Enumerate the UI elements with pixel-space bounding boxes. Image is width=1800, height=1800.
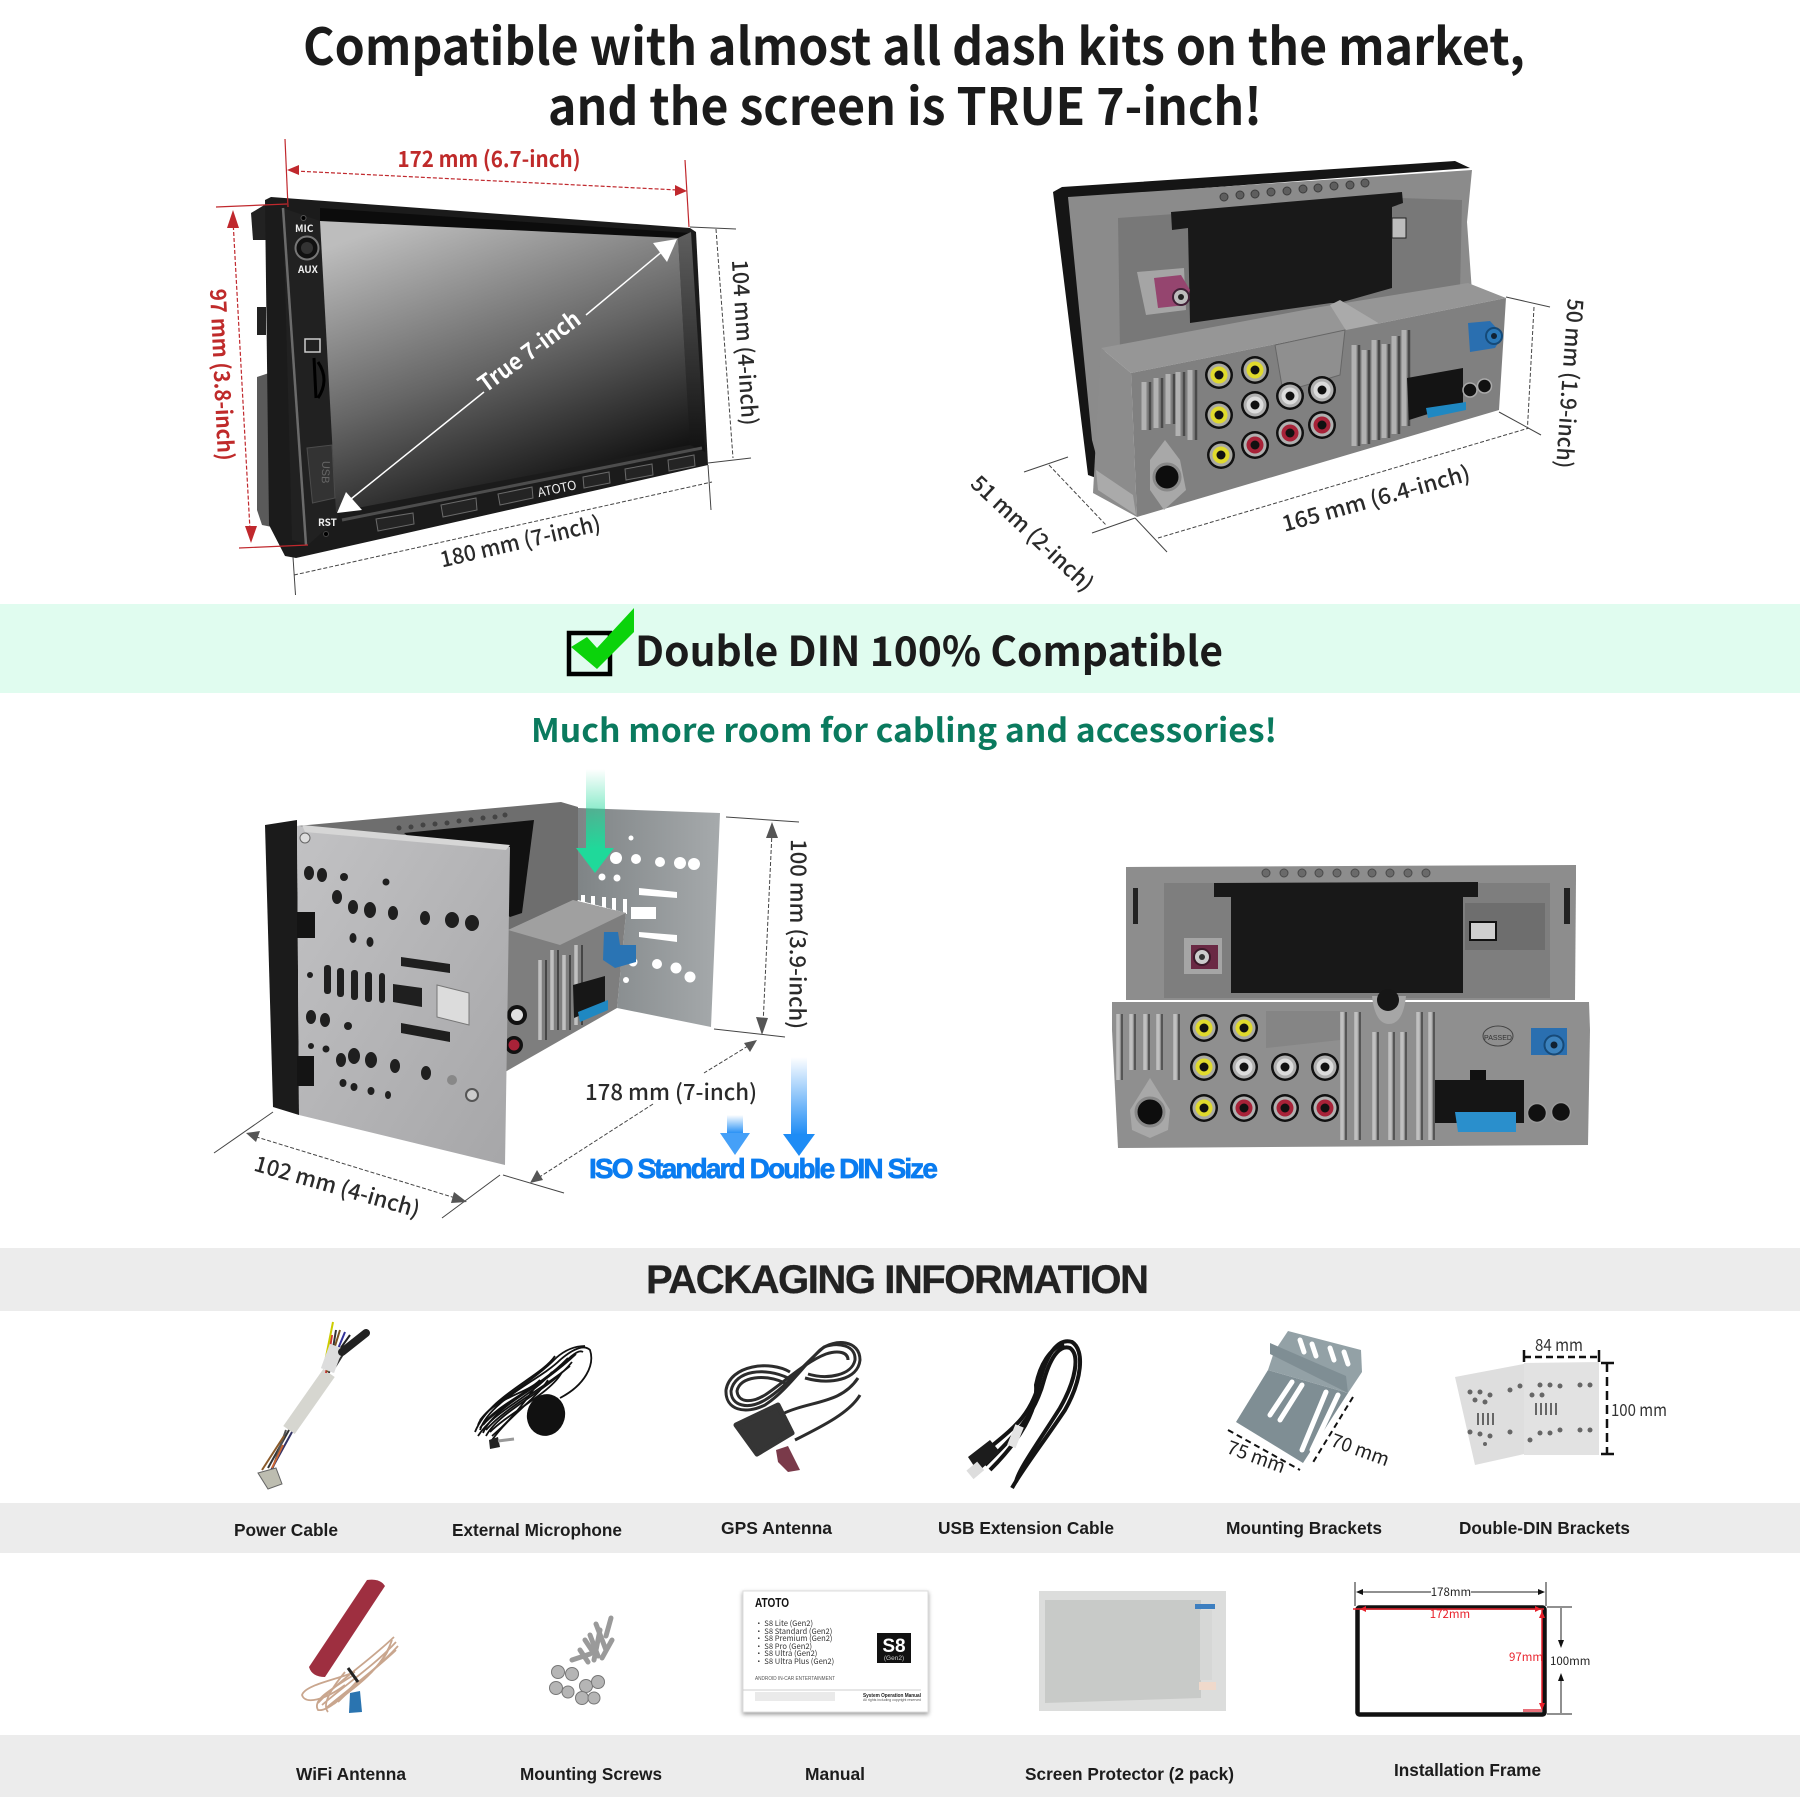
title: Compatible with almost all dash kits on the market, xyxy=(303,6,1525,80)
item: installation frame xyxy=(1353,1582,1590,1714)
dimension: 180 mm xyxy=(293,465,712,595)
rear device xyxy=(1053,161,1506,517)
panel: rear view of head unit with dimensions xyxy=(964,161,1593,598)
device front body: USB xyxy=(319,461,331,484)
item: manual: System Operation Manual xyxy=(863,1693,921,1699)
arrow: green downward xyxy=(576,769,614,873)
plate holes xyxy=(304,866,479,1099)
item: USB extension cable xyxy=(966,1341,1080,1488)
panel: straight rear view xyxy=(1112,865,1590,1148)
item: power cable xyxy=(258,1322,366,1489)
icon: green check in box xyxy=(569,608,634,674)
front black side xyxy=(265,820,299,1115)
item: mounting brackets xyxy=(1224,1331,1394,1479)
item: external microphone xyxy=(475,1346,591,1449)
title: and the screen is TRUE 7-inch! xyxy=(548,66,1262,140)
item: installation frame: 178mm xyxy=(1431,1584,1471,1600)
packaging heading xyxy=(0,1248,1800,1311)
device front body: AUX xyxy=(297,261,319,276)
dimension: 172 mm xyxy=(285,139,689,227)
dimension: 178 mm: 178 mm (7-inch) xyxy=(585,1075,757,1107)
navigation connector xyxy=(1137,268,1190,315)
dimension: 165 mm xyxy=(1135,428,1529,552)
ISO standard label: ISO Standard Double DIN Size xyxy=(589,1153,938,1184)
item: mounting screws xyxy=(550,1618,612,1704)
item: manual: • S8 Premium (Gen2) xyxy=(755,1633,832,1644)
arrows: blue downward xyxy=(720,1057,815,1156)
row 2 item labels: Manual xyxy=(805,1764,865,1784)
item: manual: • S8 Ultra (Gen2) xyxy=(755,1648,817,1659)
dimension: 180 mm: 180 mm (7-inch) xyxy=(436,506,603,574)
dimension: 100 mm xyxy=(714,817,816,1037)
title xyxy=(303,6,1525,140)
row 2 item labels xyxy=(296,1760,1541,1784)
row 1 item labels xyxy=(234,1518,1630,1540)
item: manual: • S8 Pro (Gen2) xyxy=(755,1641,812,1652)
item: manual: • S8 Ultra Plus (Gen2) xyxy=(755,1656,834,1667)
dimension: 100 mm: 100 mm (3.9-inch) xyxy=(782,839,816,1029)
dimension: 97 mm xyxy=(203,204,308,548)
wifi connector and QC seal: PASSED xyxy=(1484,1035,1512,1042)
item: double-DIN brackets: 84 mm xyxy=(1535,1331,1583,1356)
wifi connector and QC seal xyxy=(1483,1026,1567,1055)
row 1 item labels: Mounting Brackets xyxy=(1226,1518,1382,1538)
device front body: ATOTO xyxy=(536,474,578,501)
dimension: 172 mm: 172 mm (6.7-inch) xyxy=(398,142,580,174)
device front body: MIC xyxy=(295,220,314,235)
row 1 labels band xyxy=(0,1503,1800,1553)
row 2 item labels: Installation Frame xyxy=(1394,1760,1541,1780)
row 1 item labels: External Microphone xyxy=(452,1520,622,1540)
RCA jacks xyxy=(1190,1014,1339,1122)
dimension: 165 mm: 165 mm (6.4-inch) xyxy=(1278,456,1473,539)
item: installation frame: 100mm xyxy=(1550,1653,1590,1669)
item: manual: • S8 Standard (Gen2) xyxy=(755,1626,832,1637)
diagonal true 7-inch marker xyxy=(337,239,677,513)
RCA jacks xyxy=(1205,356,1336,469)
device front body: RST xyxy=(318,514,337,529)
cooling fins xyxy=(1118,1012,1430,1140)
metal chassis and black panel xyxy=(297,802,578,1000)
antenna socket xyxy=(1130,1078,1170,1138)
item: mounting brackets: 70 mm xyxy=(1328,1426,1394,1472)
far bracket xyxy=(578,808,720,1027)
diagonal true 7-inch marker: True 7-inch xyxy=(470,301,587,399)
item: double-DIN brackets: 100 mm xyxy=(1611,1396,1667,1421)
dimension: 50 mm xyxy=(1499,297,1593,470)
item: manual: (Gen2) xyxy=(884,1655,904,1662)
navigation connector xyxy=(1184,938,1222,974)
band: double DIN compatible: Double DIN 100% Compatible xyxy=(635,618,1223,678)
panel: front view of head unit with dimensions xyxy=(203,139,767,595)
item: manual: ANDROID IN-CAR ENTERTAINMENT xyxy=(755,1676,836,1682)
item: mounting brackets: 75 mm xyxy=(1224,1433,1290,1479)
item: GPS antenna xyxy=(726,1343,860,1472)
dimension: 104 mm xyxy=(690,227,767,463)
touch buttons xyxy=(376,455,695,531)
item: manual: All rights including copyright reserved xyxy=(863,1698,921,1702)
row 2 item labels: WiFi Antenna xyxy=(296,1764,406,1784)
radio rear block xyxy=(505,900,636,1072)
item: installation frame: 97mm xyxy=(1509,1649,1543,1665)
row 2 item labels: Screen Protector (2 pack) xyxy=(1025,1764,1234,1784)
item: screen protector xyxy=(1039,1591,1226,1711)
row 1 item labels: USB Extension Cable xyxy=(938,1518,1114,1538)
band: double DIN compatible xyxy=(0,604,1800,693)
dimension: 178 mm xyxy=(503,1040,757,1193)
dimension: 97 mm: 97 mm (3.8-inch) xyxy=(203,288,243,461)
dimension: 50 mm: 50 mm (1.9-inch) xyxy=(1549,298,1593,470)
item: manual: S8 xyxy=(882,1636,906,1657)
item: manual: • S8 Lite (Gen2) xyxy=(755,1618,813,1629)
row 2 item labels: Mounting Screws xyxy=(520,1764,662,1784)
item: manual xyxy=(743,1591,928,1712)
wifi connector xyxy=(1468,321,1503,352)
dimension: 51 mm: 51 mm (2-inch) xyxy=(964,467,1102,598)
cooling fins xyxy=(1144,330,1404,446)
dimension: 102 mm: 102 mm (4-inch) xyxy=(251,1146,424,1224)
item: installation frame: 172mm xyxy=(1430,1606,1470,1622)
packaging heading: PACKAGING INFORMATION xyxy=(646,1258,1149,1302)
row 2 labels band xyxy=(0,1735,1800,1797)
antenna socket xyxy=(1150,440,1186,510)
item: double-DIN brackets xyxy=(1455,1331,1667,1465)
item: WiFi antenna xyxy=(302,1580,398,1713)
item: manual: ATOTO xyxy=(755,1595,789,1610)
row 1 item labels: Power Cable xyxy=(234,1520,338,1540)
dimension: 102 mm xyxy=(214,1112,500,1224)
row 1 item labels: Double-DIN Brackets xyxy=(1459,1518,1630,1538)
device front body xyxy=(251,197,708,558)
dimension: 104 mm: 104 mm (4-inch) xyxy=(725,259,767,426)
panel: unit with double DIN brackets xyxy=(214,769,938,1224)
wiring connector xyxy=(1435,1070,1570,1132)
wiring connector xyxy=(1407,368,1492,420)
subheading: Much more room for cabling and accessories! xyxy=(531,705,1277,752)
row 1 item labels: GPS Antenna xyxy=(721,1518,832,1538)
